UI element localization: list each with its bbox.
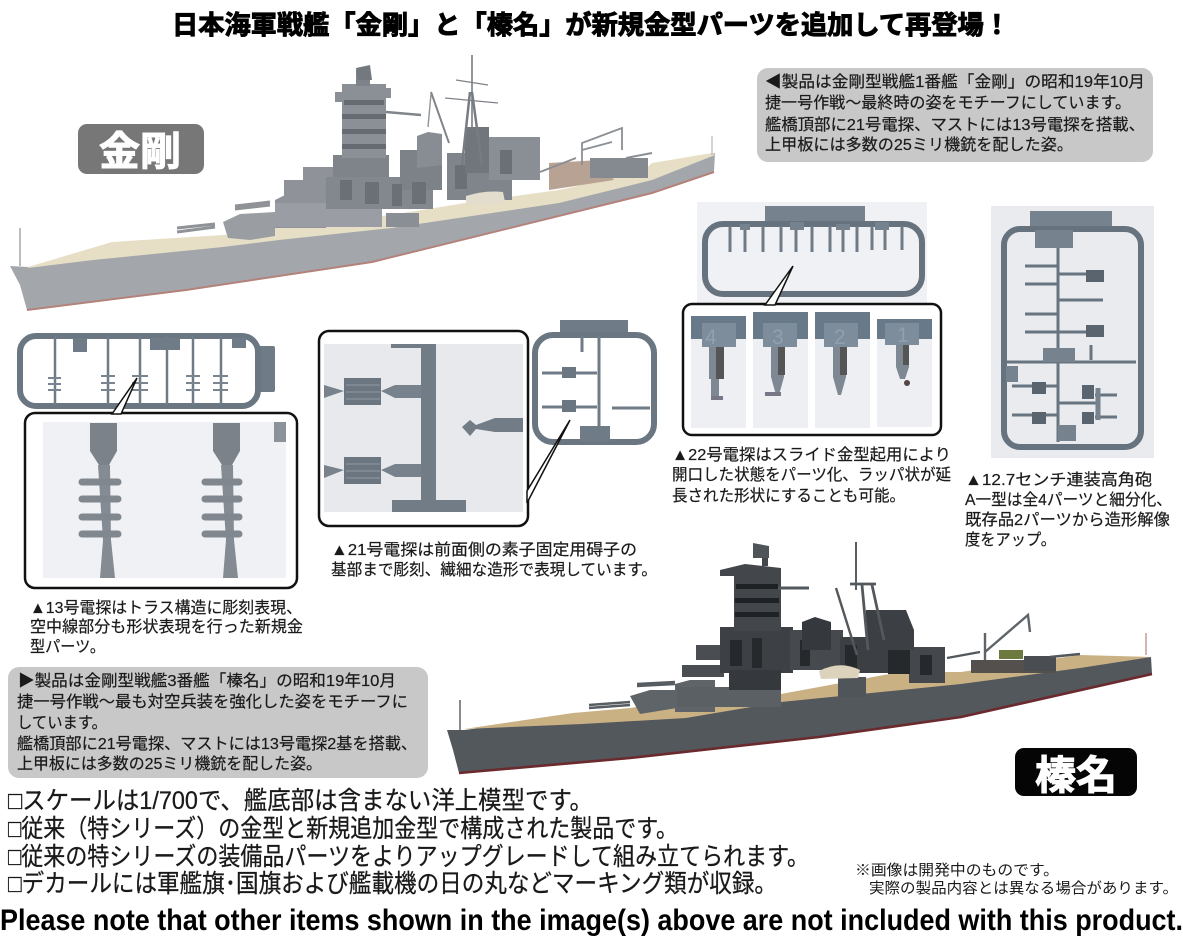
caption: No.21 radar: 基部まで彫刻、繊細な造形で表現しています。 <box>331 561 657 579</box>
callout: Kongo description: ◀製品は金剛型戦艦1番艦「金剛」の昭和19年10月 <box>765 73 1145 91</box>
feature list <box>8 787 809 898</box>
turrets <box>223 212 275 240</box>
pagoda tower <box>342 84 386 158</box>
inset: No.22 radar close-up: 2 <box>834 326 846 349</box>
label: Haruna <box>1015 748 1137 798</box>
feature list: □スケールは1/700で、艦底部は含まない洋上模型です。 <box>8 787 593 815</box>
caption: 12.7cm gun: 既存品2パーツから造形解像 <box>965 511 1170 529</box>
caption: No.21 radar <box>331 541 657 579</box>
leader: No.21 radar <box>527 420 570 503</box>
inset: No.22 radar close-up: 4 <box>705 326 717 349</box>
label: Kongo <box>78 124 204 174</box>
caption: 12.7cm gun: A一型は全4パーツと細分化、 <box>965 491 1172 509</box>
feature list: □従来の特シリーズの装備品パーツをよりアップグレードして組み立てられます。 <box>8 843 809 871</box>
callout: Kongo description: 上甲板には多数の25ミリ機銃を配した姿。 <box>765 136 1073 154</box>
label: Kongo: 金剛 <box>99 130 181 174</box>
ship: Kongo model photo <box>10 55 715 310</box>
inset: No.22 radar close-up: 1 <box>897 324 909 347</box>
note: development image: ※画像は開発中のものです。 <box>855 862 1059 879</box>
caption: No.21 radar: ▲21号電探は前面側の素子固定用碍子の <box>331 541 637 559</box>
callout: Haruna description <box>8 667 428 778</box>
leader: No.22 radar <box>765 266 793 305</box>
caption: 12.7cm gun: 度をアップ。 <box>965 531 1056 549</box>
superstructure blocks <box>677 687 781 707</box>
boat and amidships <box>466 192 505 205</box>
aft crane and structures <box>582 128 622 165</box>
turrets <box>630 690 677 714</box>
feature list: □従来（特シリーズ）の金型と新規追加金型で構成された製品です。 <box>8 815 678 843</box>
callout: Haruna description: 上甲板には多数の25ミリ機銃を配した姿。 <box>17 755 322 773</box>
pagoda tower <box>720 564 781 576</box>
callout: Haruna description: しています。 <box>17 714 107 732</box>
panel: No.13 radar sprue <box>20 336 275 406</box>
inset: No.22 radar close-up <box>683 304 941 435</box>
panel: 12.7cm gun sprue <box>991 206 1154 458</box>
caption: No.13 radar <box>30 599 303 656</box>
callout: Haruna description: 艦橋頂部に21号電探、マストには13号電探2基を搭載、 <box>17 735 417 753</box>
note: development image <box>855 862 1178 897</box>
caption: 12.7cm gun <box>965 471 1172 549</box>
caption: 12.7cm gun: ▲12.7センチ連装高角砲 <box>965 471 1152 489</box>
inset: No.13 radar close-up <box>25 413 297 588</box>
callout: Kongo description <box>757 68 1153 162</box>
leader: No.13 radar <box>112 378 137 414</box>
caption: No.22 radar: 長された形状にすることも可能。 <box>672 487 905 505</box>
title: 日本海軍戦艦「金剛」と「榛名」が新規金型パーツを追加して再登場！ <box>172 10 1010 40</box>
caption: No.13 radar: 空中線部分も形状表現を行った新規金 <box>30 618 303 636</box>
inset: No.21 radar close-up <box>319 331 528 526</box>
inset: No.22 radar close-up: 3 <box>772 326 784 349</box>
caption: No.13 radar: 型パーツ。 <box>30 638 105 656</box>
panel: No.22 radar sprue <box>697 202 927 305</box>
superstructure blocks <box>275 203 382 227</box>
boat <box>819 665 860 679</box>
caption: No.22 radar <box>672 446 951 505</box>
callout: Haruna description: 捷一号作戦～最も対空兵装を強化した姿をモチーフに <box>17 693 408 711</box>
feature list: □デカールには軍艦旗･国旗および艦載機の日の丸などマーキング類が収録。 <box>8 870 777 898</box>
panel: No.21 radar sprue <box>535 320 654 442</box>
note: development image: 実際の製品内容とは異なる場合があります。 <box>869 880 1178 897</box>
callout: Kongo description: 艦橋頂部に21号電探、マストには13号電探を搭載、 <box>765 116 1145 134</box>
callout: Haruna description: ▶製品は金剛型戦艦3番艦「榛名」の昭和19年10月 <box>18 672 396 690</box>
ship: Haruna model photo <box>447 542 1152 773</box>
funnel and rear tower <box>417 132 442 168</box>
caption: No.22 radar: 開口した状態をパーツ化、ラッパ状が延 <box>672 466 951 484</box>
funnel and rear tower <box>802 617 831 650</box>
caption: No.13 radar: ▲13号電探はトラス構造に彫刻表現、 <box>30 599 302 617</box>
caption: No.22 radar: ▲22号電探はスライド金型起用により <box>672 446 951 464</box>
aft crane and structures <box>985 615 1030 662</box>
label: Haruna: 榛名 <box>1035 754 1117 798</box>
callout: Kongo description: 捷一号作戦～最終時の姿をモチーフにしています。 <box>765 94 1131 112</box>
